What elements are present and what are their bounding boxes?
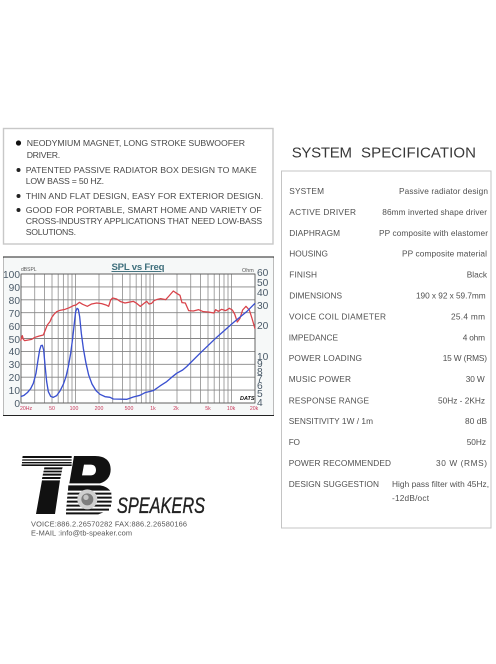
- spec labels: RESPONSE RANGE: [289, 396, 369, 406]
- spec labels: MUSIC POWER: [289, 374, 351, 384]
- feature 1: NEODYMIUM MAGNET, LONG STROKE SUBWOOFER: [27, 138, 245, 148]
- right axis labels: 8: [257, 367, 263, 378]
- red SPL curve: [21, 291, 255, 341]
- frequency axis labels: 2k: [173, 406, 179, 412]
- spec labels: FO: [289, 437, 301, 447]
- frequency axis labels: 100: [70, 406, 78, 412]
- right axis labels: 30: [257, 301, 269, 312]
- blue impedance curve: [21, 303, 255, 399]
- spec labels: ACTIVE DRIVER: [289, 207, 356, 217]
- spec labels: POWER RECOMMENDED: [289, 458, 391, 468]
- heading: system specification: SPECIFICATION: [361, 144, 476, 162]
- spec values: 86mm inverted shape driver: [382, 207, 487, 217]
- panel: features: [4, 128, 273, 244]
- chart title: SPL vs Freq: [112, 262, 165, 273]
- right axis labels: Ohm: [242, 268, 254, 274]
- frequency axis labels: [20, 406, 259, 412]
- feature 2: PATENTED PASSIVE RADIATOR BOX DESIGN TO MAKE: [26, 165, 257, 175]
- left axis labels: [3, 267, 37, 410]
- right axis labels: 5: [257, 389, 263, 400]
- spec values: 30 W: [466, 374, 485, 384]
- logo mark: [22, 456, 112, 514]
- spec values: 15 W (RMS): [443, 353, 487, 363]
- right axis labels: 9: [257, 359, 263, 370]
- frequency axis labels: 200: [95, 406, 103, 412]
- spec values: 50Hz: [467, 437, 486, 447]
- spec values: 50Hz - 2KHz: [438, 396, 485, 406]
- heading: system specification: SYSTEM: [292, 144, 352, 162]
- spec labels: POWER LOADING: [289, 353, 362, 363]
- left axis labels: 20: [9, 373, 20, 384]
- logo: TB Speakers: [22, 456, 205, 538]
- feature 3: THIN AND FLAT DESIGN, EASY FOR EXTERIOR DESIGN.: [26, 191, 263, 201]
- feature 1: DRIVER.: [27, 150, 60, 160]
- left axis labels: 60: [9, 322, 20, 333]
- spec values: Black: [467, 270, 488, 280]
- left axis labels: dBSPL: [21, 267, 37, 273]
- feature 4: CROSS-INDUSTRY APPLICATIONS THAT NEED LOW-BASS: [26, 216, 262, 226]
- feature 4: GOOD FOR PORTABLE, SMART HOME AND VARIETY OF: [26, 205, 262, 215]
- left axis labels: 90: [9, 283, 20, 294]
- spec values: 80 dB: [465, 416, 487, 426]
- right axis labels: 4: [257, 398, 263, 409]
- spec values: [379, 186, 489, 503]
- spec values: Passive radiator design: [399, 186, 488, 196]
- frequency axis labels: 20k: [250, 406, 259, 412]
- spec labels: [289, 186, 391, 489]
- spec labels: FINISH: [289, 270, 317, 280]
- contact details: [31, 520, 187, 538]
- spec values: PP composite material: [402, 249, 487, 259]
- right axis labels: 20: [257, 321, 269, 332]
- spec labels: SYSTEM: [289, 186, 324, 196]
- logo wordmark: SPEAKERS: [117, 493, 205, 518]
- spec labels: DESIGN SUGGESTION: [289, 479, 379, 489]
- spec values: 4 ohm: [463, 333, 485, 343]
- frequency axis labels: 10k: [227, 406, 236, 412]
- left axis labels: 80: [9, 296, 20, 307]
- right axis labels: 50: [257, 278, 269, 289]
- frequency axis labels: 20Hz: [20, 406, 32, 412]
- heading: system specification: [292, 144, 476, 162]
- spec labels: VOICE COIL DIAMETER: [289, 312, 386, 322]
- right axis labels: 60: [257, 268, 269, 279]
- left axis labels: 70: [9, 309, 20, 320]
- DATS badge: DATS: [240, 396, 255, 402]
- frequency axis labels: 1k: [150, 406, 156, 412]
- spec labels: DIAPHRAGM: [289, 228, 340, 238]
- spec values: High pass filter with 45Hz,: [392, 479, 489, 489]
- right axis labels: 40: [257, 288, 269, 299]
- spec values: 190 x 92 x 59.7mm: [416, 290, 486, 300]
- frequency axis labels: 5k: [205, 406, 211, 412]
- left axis labels: 0: [14, 399, 20, 410]
- left axis labels: 50: [9, 335, 20, 346]
- spec labels: IMPEDANCE: [289, 333, 338, 343]
- spec labels: DIMENSIONS: [289, 290, 342, 300]
- spec values: -12dB/oct: [392, 493, 430, 503]
- frequency axis labels: 500: [125, 406, 133, 412]
- spec labels: SENSITIVITY 1W / 1m: [289, 416, 373, 426]
- right axis labels: [242, 268, 269, 409]
- chart: SPL vs Freq: [3, 257, 274, 416]
- feature 4: [16, 205, 262, 237]
- right axis labels: 10: [257, 352, 269, 363]
- spec values: PP composite with elastomer: [379, 228, 488, 238]
- feature 2: LOW BASS = 50 HZ.: [26, 176, 104, 186]
- left axis labels: 30: [9, 360, 20, 371]
- left axis labels: 10: [9, 386, 20, 397]
- spec labels: HOUSING: [289, 249, 328, 259]
- right axis labels: 7: [257, 374, 263, 385]
- panel: specification table: [282, 171, 491, 528]
- feature 2: [16, 165, 257, 186]
- left axis labels: 40: [9, 347, 20, 358]
- spec values: 25.4 mm: [451, 312, 485, 322]
- contact details: VOICE:886.2.26570282 FAX:886.2.26580166: [31, 520, 187, 528]
- feature 4: SOLUTIONS.: [26, 227, 76, 237]
- frequency axis labels: 50: [49, 406, 55, 412]
- contact details: E-MAIL :info@tb-speaker.com: [31, 528, 132, 538]
- feature 1: [16, 138, 245, 160]
- spec values: 30 W (RMS): [436, 458, 487, 468]
- left axis labels: 100: [3, 270, 20, 281]
- right axis labels: 6: [257, 381, 263, 392]
